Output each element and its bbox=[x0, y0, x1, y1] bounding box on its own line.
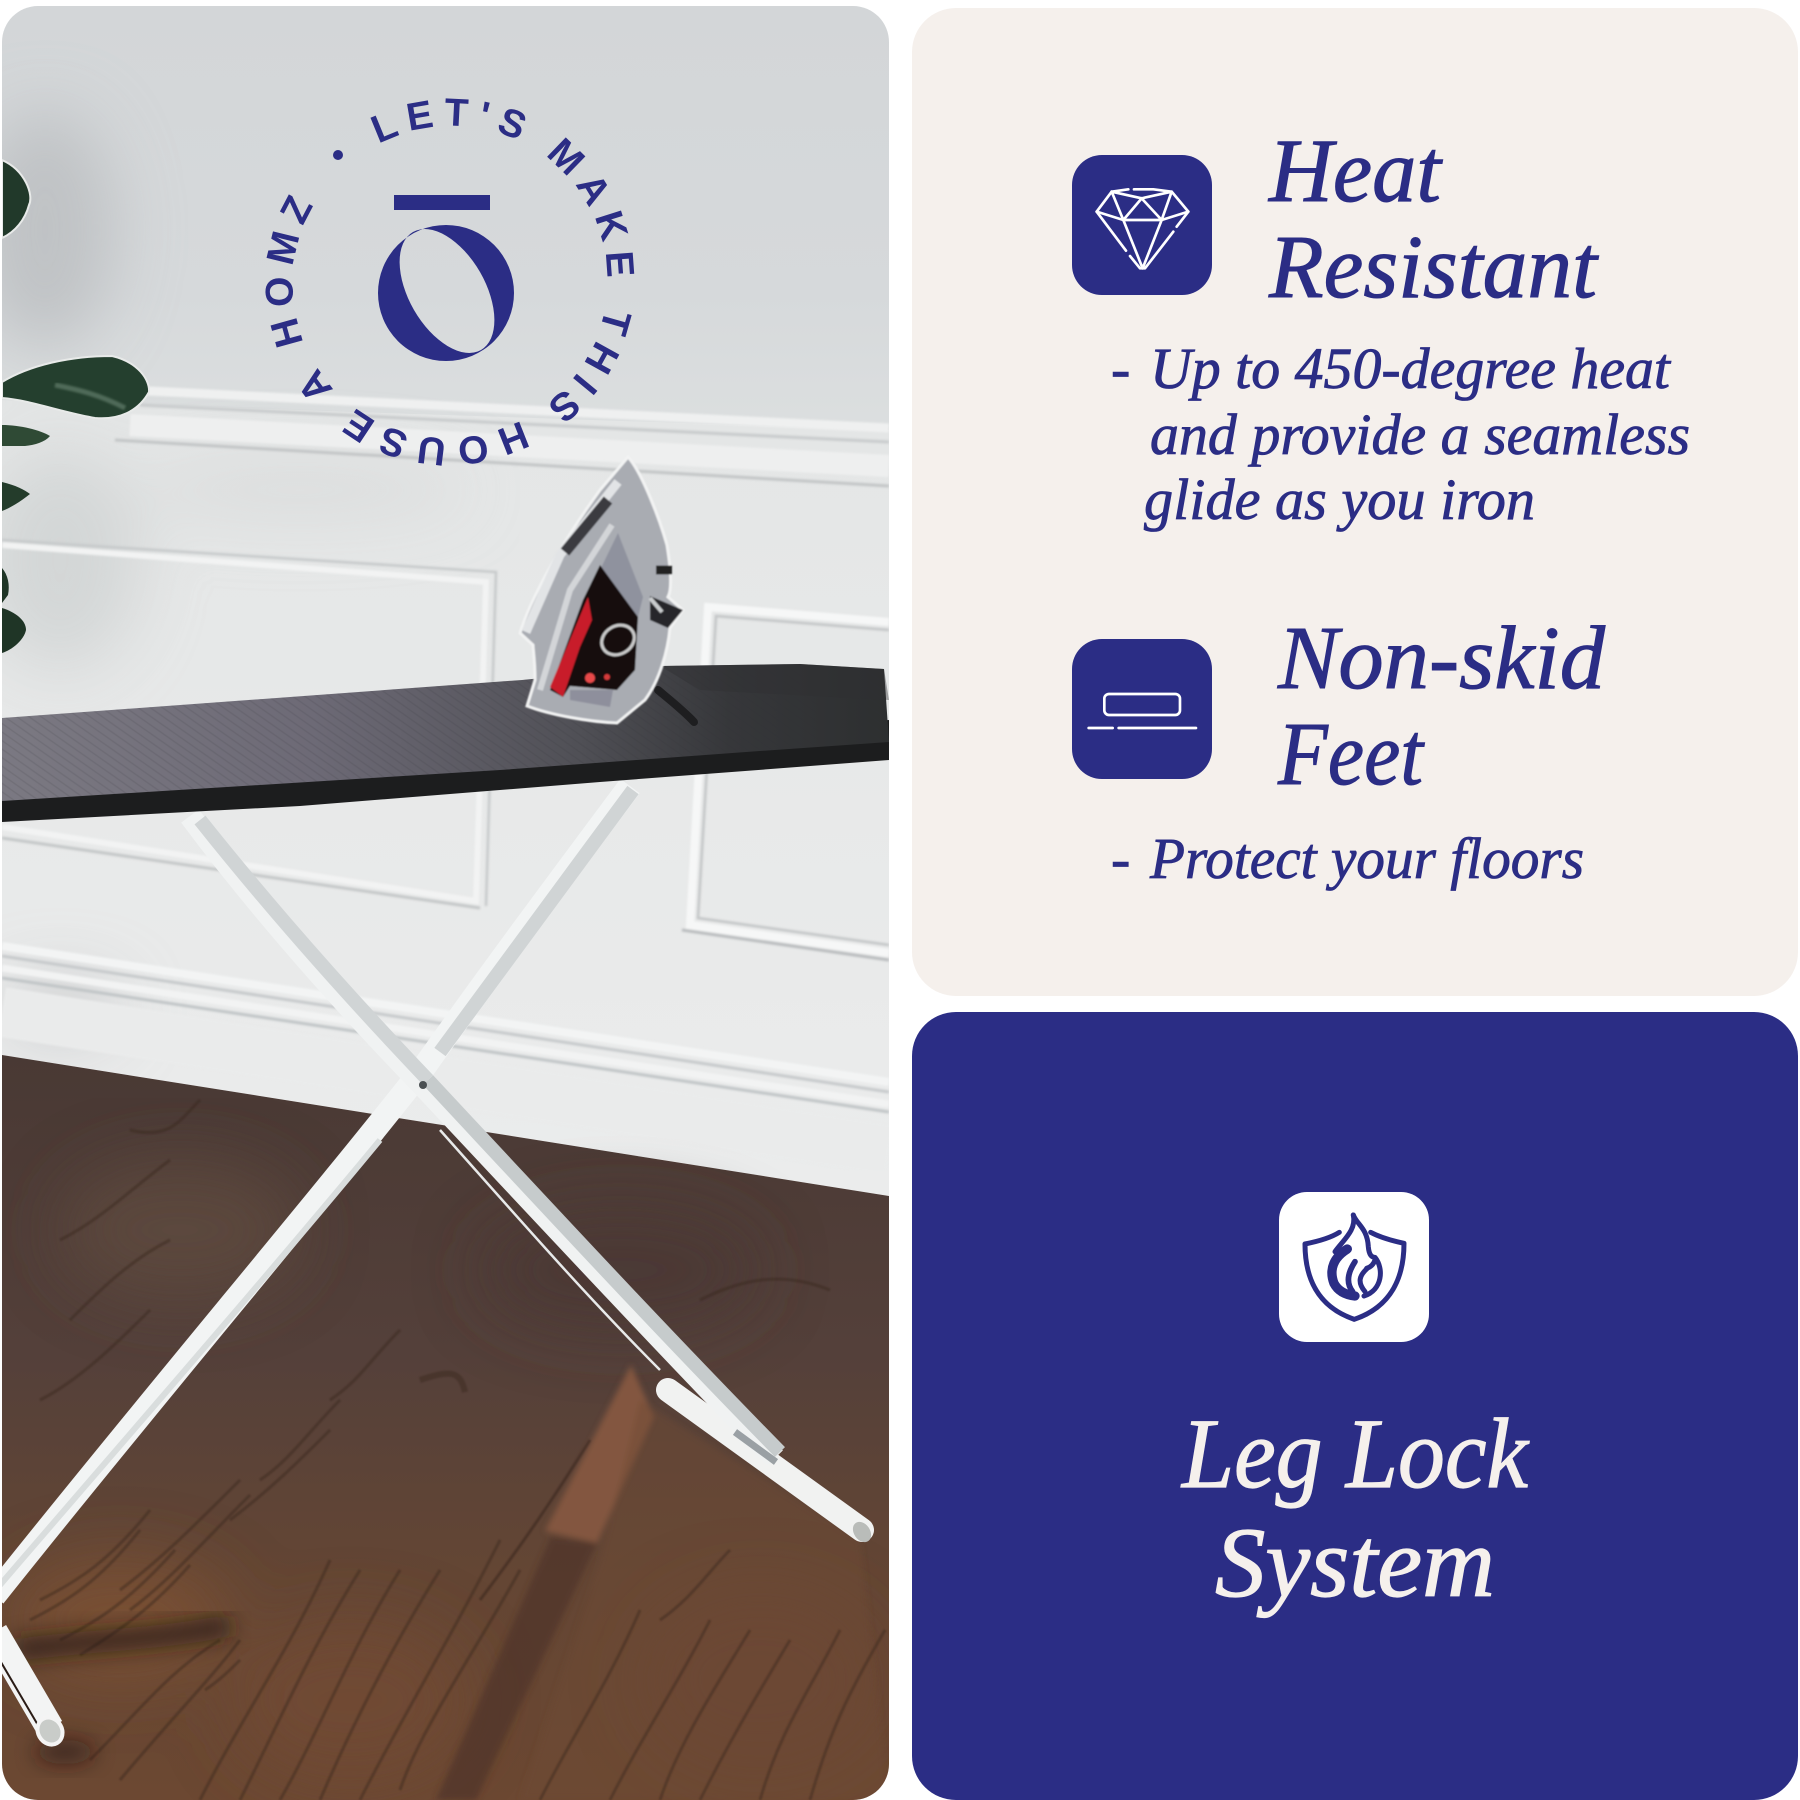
heading: Non-skid Feet: Non-skid bbox=[1277, 609, 1606, 708]
icon: flame shield bbox=[1279, 1192, 1429, 1342]
heading: Leg Lock System bbox=[1180, 1398, 1530, 1618]
text: heat resistance description: glide as you iron bbox=[1144, 467, 1535, 532]
ironing board bbox=[2, 664, 889, 822]
logo: circular tagline and mark bbox=[265, 98, 634, 466]
panel: photo of ironing board bbox=[2, 6, 889, 1800]
text: heat resistance description bbox=[1111, 336, 1690, 532]
wood grain bbox=[30, 1100, 885, 1800]
heading: Heat Resistant bbox=[1268, 122, 1599, 317]
heading: Non-skid Feet bbox=[1277, 609, 1606, 804]
right foot bar bbox=[668, 1390, 875, 1546]
panel: leg lock bbox=[912, 1012, 1798, 1800]
left front leg foot bbox=[0, 1632, 67, 1749]
wall shadows bbox=[2, 108, 145, 1056]
plant leaves bbox=[2, 160, 149, 653]
heading: Non-skid Feet: Feet bbox=[1277, 705, 1425, 804]
text: non-skid description: - bbox=[1111, 826, 1130, 891]
upper wall bbox=[2, 6, 889, 430]
heading: Heat Resistant: Heat bbox=[1268, 122, 1443, 221]
crossed legs bbox=[0, 786, 780, 1596]
iron cord bbox=[658, 690, 694, 722]
panel: features bbox=[912, 8, 1798, 996]
wooden floor bbox=[2, 1055, 889, 1800]
wall panel mouldings bbox=[2, 540, 889, 960]
leg shadow on floor bbox=[15, 1625, 230, 1764]
heading: Heat Resistant: Resistant bbox=[1268, 218, 1599, 317]
logo circular text: LET'S MAKE THIS HOUSE A HOMZ bbox=[265, 98, 634, 466]
wainscot wall bbox=[2, 400, 889, 1196]
icon: diamond bbox=[1072, 155, 1212, 295]
baseboard bbox=[2, 943, 889, 1114]
chair rail moulding bbox=[115, 390, 889, 486]
text: non-skid description: Protect your floors bbox=[1149, 826, 1584, 891]
clothes iron bbox=[520, 457, 683, 723]
pivot bolt bbox=[419, 1081, 427, 1089]
text: heat resistance description: and provide a seamless bbox=[1150, 402, 1690, 467]
icon: non-skid foot bbox=[1072, 639, 1212, 779]
text: heat resistance description: - bbox=[1111, 336, 1130, 401]
heading: Leg Lock System: System bbox=[1215, 1507, 1495, 1618]
floor planks bbox=[436, 1365, 889, 1800]
heading: Leg Lock System: Leg Lock bbox=[1180, 1398, 1530, 1509]
floor tonal patches bbox=[17, 1170, 396, 1688]
text: heat resistance description: Up to 450-degree heat bbox=[1150, 336, 1672, 401]
